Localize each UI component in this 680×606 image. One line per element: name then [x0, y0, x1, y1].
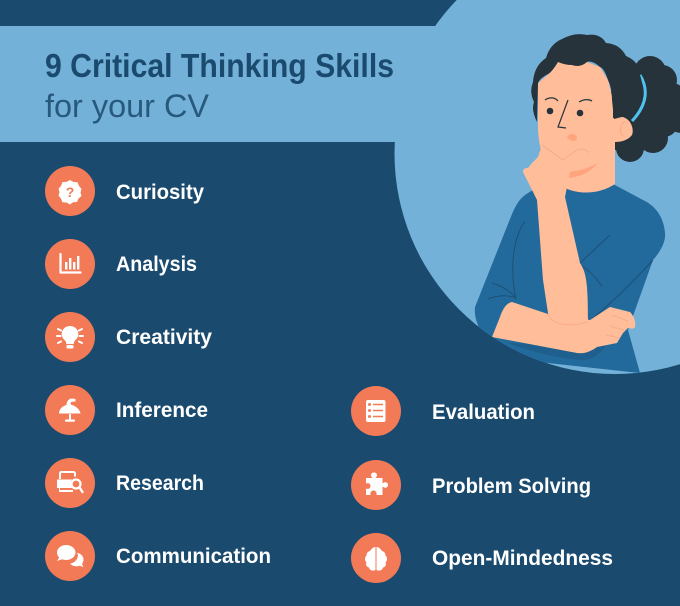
forearm underside shadow [508, 343, 606, 360]
icon: document and magnifier [45, 458, 95, 508]
icon: checklist [351, 386, 401, 436]
skill: Open-Mindedness [351, 533, 613, 583]
icon: puzzle piece [351, 460, 401, 510]
face details [545, 98, 592, 128]
skill: Evaluation [351, 386, 535, 436]
label: Analysis [116, 252, 197, 276]
title: 9 Critical Thinking Skills [45, 47, 394, 84]
title: for your CV [45, 88, 210, 124]
label: Evaluation [432, 400, 535, 424]
hand and elbow lines [542, 145, 628, 338]
hair bun [608, 56, 680, 162]
label: Inference [116, 398, 208, 422]
icon: question badge: ? [66, 184, 74, 200]
ear detail [621, 121, 625, 136]
headband [632, 75, 645, 121]
chin shadow [567, 163, 597, 178]
icon: desk lamp [45, 385, 95, 435]
skill: Inference [45, 385, 208, 435]
skill: Analysis [45, 239, 197, 289]
label: Curiosity [116, 180, 204, 204]
folded forearm and hand [492, 302, 635, 353]
skill: Research [45, 458, 204, 508]
icon: speech bubbles [45, 531, 95, 581]
icon: light bulb [45, 312, 95, 362]
skill: Curiosity [45, 166, 204, 216]
shirt creases [488, 221, 653, 322]
skill: Communication [45, 531, 271, 581]
panel: light blue circle backdrop [394, 0, 680, 374]
skill: Problem Solving [351, 460, 591, 510]
label: Research [116, 471, 204, 495]
title [45, 47, 394, 124]
label: Open-Mindedness [432, 546, 613, 570]
panel: title banner [0, 26, 440, 142]
label: Problem Solving [432, 474, 591, 498]
label: Creativity [116, 325, 212, 349]
icon: bar chart [45, 239, 95, 289]
illustration: thinking woman [475, 34, 680, 373]
neck and face [538, 62, 633, 193]
label: Communication [116, 544, 271, 568]
shirt [475, 184, 665, 373]
skill: Creativity [45, 312, 212, 362]
icon: brain [351, 533, 401, 583]
hair front [531, 34, 642, 122]
icon: question badge [45, 166, 95, 216]
raised arm and hand [523, 145, 588, 327]
